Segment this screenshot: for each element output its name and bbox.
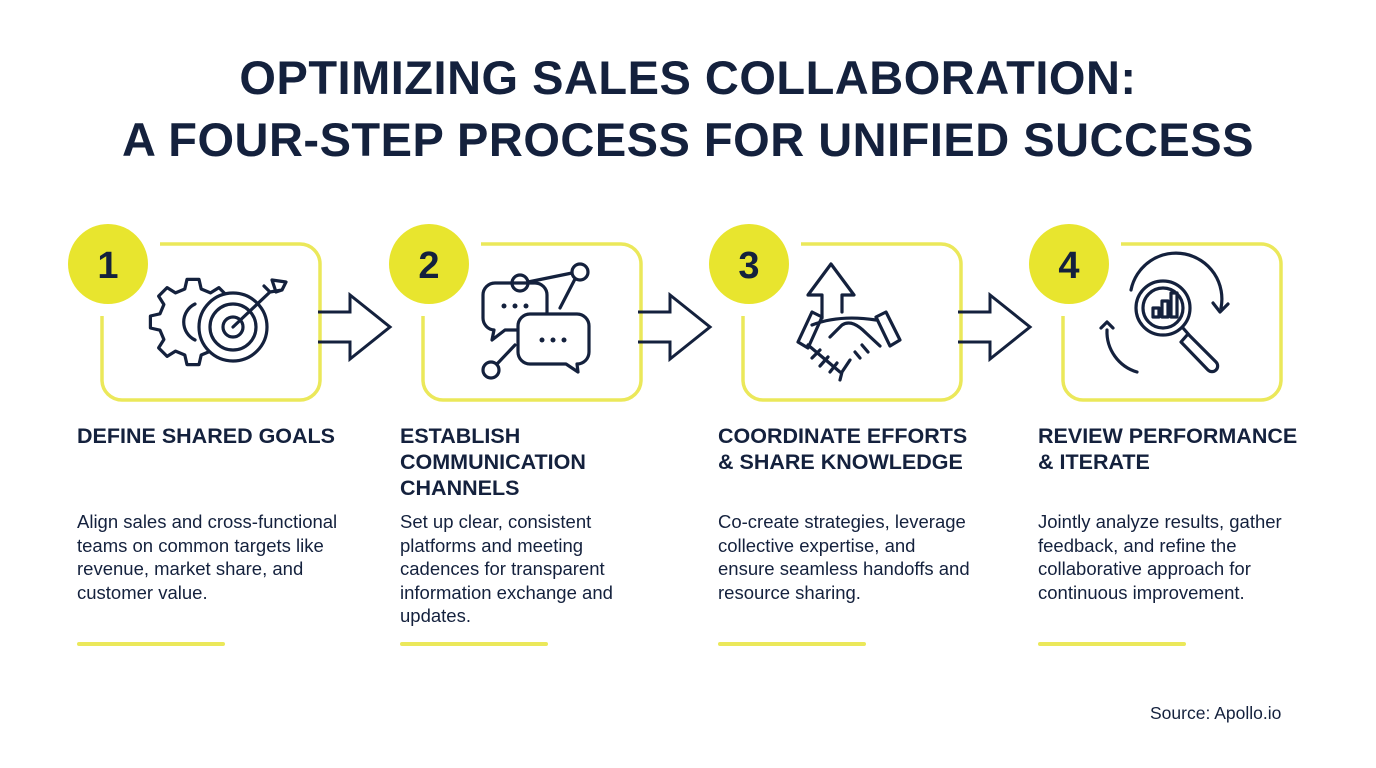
step 3 graphic: 3: [738, 245, 760, 287]
step 3 text: collective expertise, and: [718, 534, 915, 556]
step 1 graphic: [68, 224, 320, 400]
step 4 underline: [1038, 642, 1186, 646]
source: Source: Apollo.io: [1150, 703, 1281, 723]
step 3 heading: [718, 424, 967, 474]
title: A FOUR-STEP PROCESS FOR UNIFIED SUCCESS: [122, 113, 1254, 166]
step 4 heading: [1038, 424, 1297, 474]
step 4 heading: & ITERATE: [1038, 450, 1150, 474]
step 1 text: Align sales and cross-functional: [77, 511, 337, 532]
step 1 underline: [77, 642, 225, 646]
step 4 text: [1038, 511, 1282, 603]
step 2 heading: CHANNELS: [400, 476, 519, 500]
step 2 text: updates.: [400, 605, 471, 626]
step 1 heading: DEFINE SHARED GOALS: [77, 424, 335, 448]
step 2 heading: [400, 424, 586, 500]
step 2 text: cadences for transparent: [400, 558, 605, 579]
step 2 text: [400, 511, 613, 626]
step 2 text: platforms and meeting: [400, 534, 583, 556]
step 2 graphic: [389, 224, 641, 400]
step 4 heading: REVIEW PERFORMANCE: [1038, 424, 1297, 448]
step 4 text: feedback, and refine the: [1038, 534, 1237, 556]
step 1 text: revenue, market share, and: [77, 558, 303, 579]
step 1 text: teams on common targets like: [77, 534, 324, 556]
step 3 heading: COORDINATE EFFORTS: [718, 424, 967, 448]
step 4 text: continuous improvement.: [1038, 582, 1245, 602]
step 3 text: resource sharing.: [718, 582, 861, 602]
step 2 heading: COMMUNICATION: [400, 450, 586, 474]
step 3 text: ensure seamless handoffs and: [718, 558, 970, 579]
step 2 underline: [400, 642, 548, 646]
process diagram: [68, 224, 1283, 402]
step 3 graphic: [709, 224, 961, 400]
step 2 text: information exchange and: [400, 582, 613, 602]
title: [122, 51, 1254, 166]
step 2 text: Set up clear, consistent: [400, 511, 591, 532]
step 3 heading: & SHARE KNOWLEDGE: [718, 450, 963, 474]
step 4 text: collaborative approach for: [1038, 558, 1251, 579]
title: OPTIMIZING SALES COLLABORATION:: [239, 51, 1137, 104]
step 3 text: [718, 511, 970, 603]
step 1 graphic: 1: [97, 245, 119, 287]
step 1 text: [77, 511, 337, 602]
step 3 text: Co-create strategies, leverage: [718, 511, 966, 532]
step 4 text: Jointly analyze results, gather: [1038, 511, 1282, 532]
step 3 underline: [718, 642, 866, 646]
step 2 graphic: 2: [418, 245, 440, 287]
step 4 graphic: 4: [1058, 245, 1080, 287]
step 1 text: customer value.: [77, 582, 208, 602]
step 2 heading: ESTABLISH: [400, 424, 520, 448]
arrows: [318, 295, 1030, 359]
step 4 graphic: [1029, 224, 1281, 400]
